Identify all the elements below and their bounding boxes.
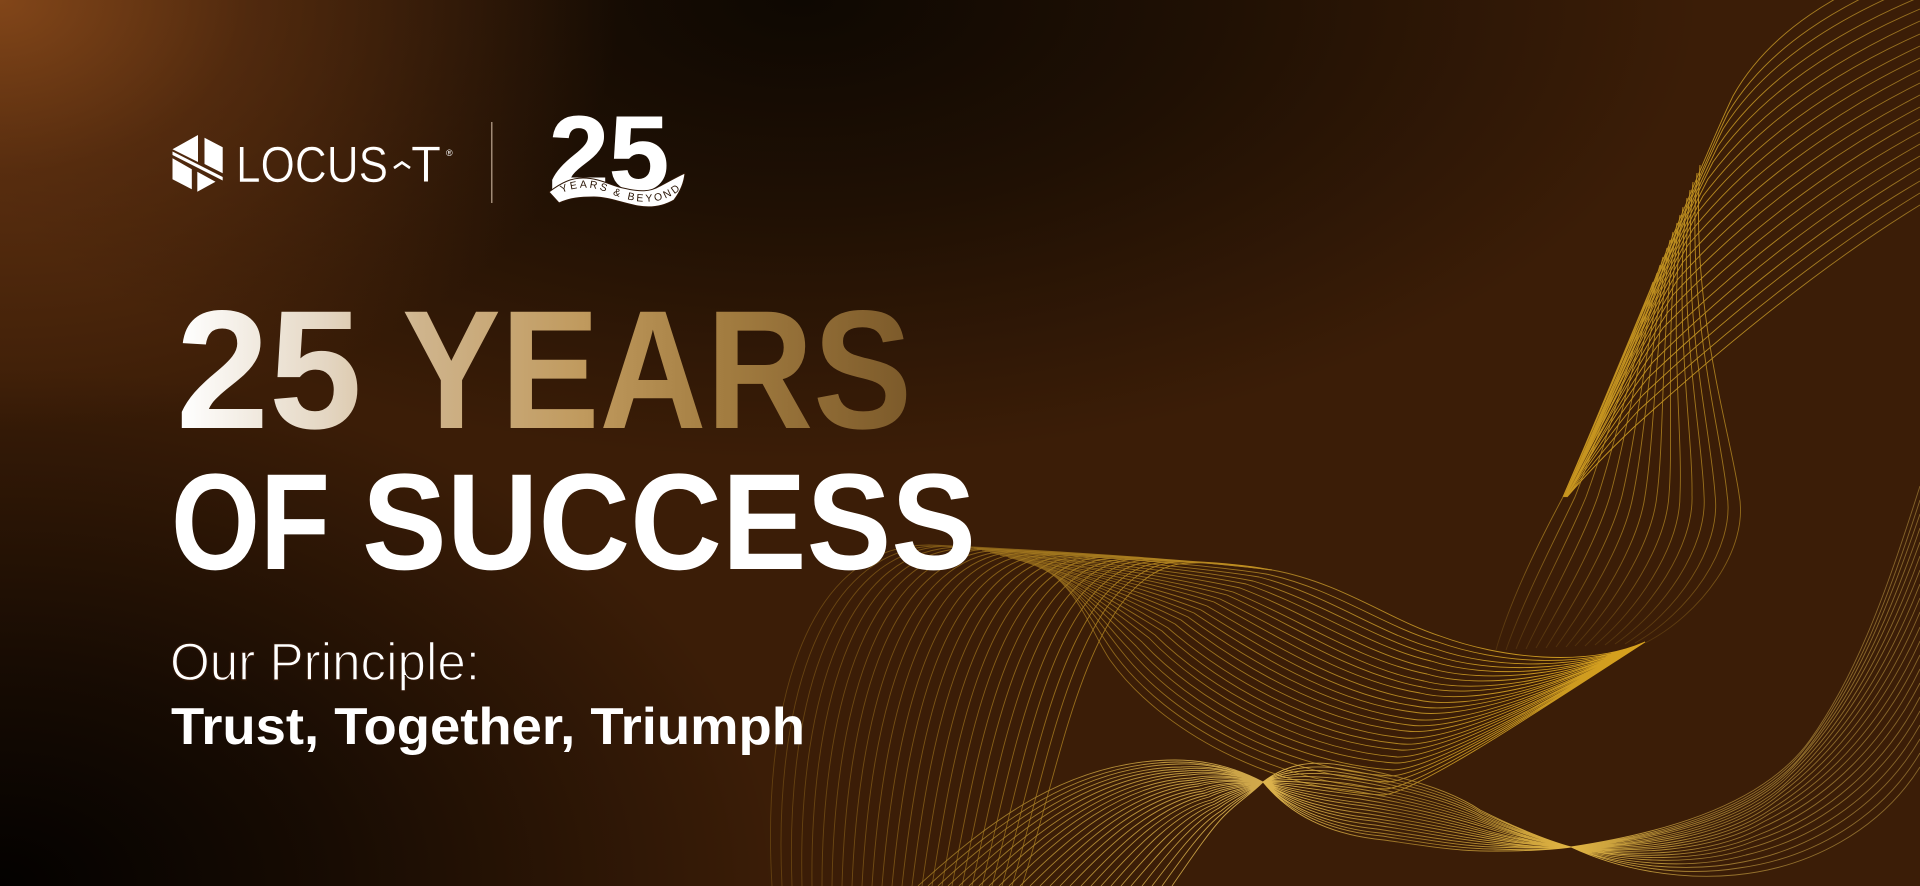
wordmark: LOCUS [236, 136, 388, 193]
wave: left arching sheet [770, 545, 1272, 886]
wordmark: ® [446, 148, 453, 158]
wordmark: T [411, 136, 441, 193]
title line 1 [176, 275, 912, 464]
ribbon [549, 173, 685, 207]
wave: top right diagonal sheet [1563, 0, 1920, 497]
decorative gold line waves [770, 0, 1920, 886]
wave: lower central pinch sheet [1263, 763, 1571, 851]
principle line: Trust, Together, Triumph [171, 698, 805, 756]
wave: central valley sheet [974, 548, 1645, 795]
title line 2: OF [171, 446, 330, 599]
wave: lower left rising sheet [918, 760, 1263, 886]
title line 1: 25 [176, 275, 362, 464]
wave: bottom right sheet [1571, 486, 1920, 876]
wave: rising sheet to crest [1496, 165, 1741, 650]
title line 2: SUCCESS [362, 446, 976, 599]
logo: LOCUS-T [172, 135, 453, 193]
logo: 25 years and beyond: 25 [549, 95, 669, 213]
subtitle: Our Principle: [170, 633, 480, 692]
ribbon text: YEARS & BEYOND [560, 180, 679, 202]
divider [491, 122, 492, 203]
icon: hexagon mark [172, 135, 223, 192]
title line 1: YEARS [402, 275, 912, 464]
